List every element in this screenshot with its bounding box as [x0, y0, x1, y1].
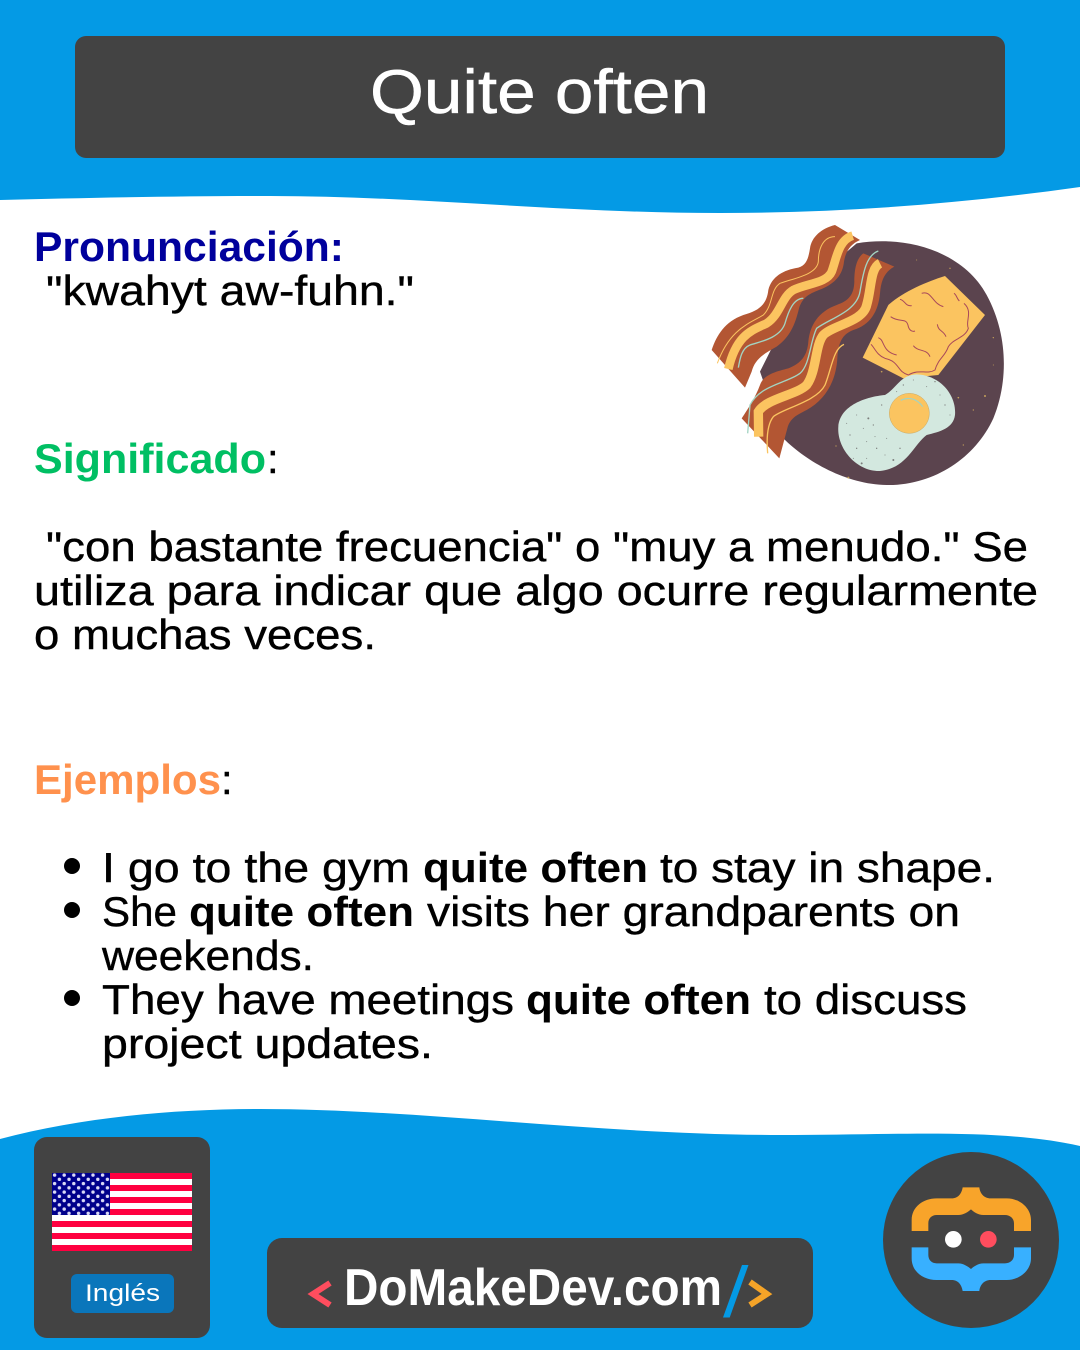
text: meaning: "con bastante frecuencia" o "muy a menudo." Se — [46, 523, 1028, 570]
title: Quite often — [370, 58, 709, 127]
example 3: to discuss — [764, 976, 967, 1023]
icon: US flag — [52, 1173, 192, 1251]
example 1: to stay in shape. — [660, 844, 995, 891]
header wave background — [0, 0, 1080, 213]
icon: slash — [723, 1265, 748, 1318]
text: meaning — [34, 523, 1038, 658]
list of examples — [64, 844, 995, 1067]
example 1: I go to the gym — [102, 844, 410, 891]
fried egg — [838, 374, 955, 471]
example 3: project updates. — [102, 1020, 433, 1067]
plate speckles — [835, 259, 994, 479]
text: meaning: o muchas veces. — [34, 611, 376, 658]
bacon strip 1 — [712, 225, 860, 388]
bacon strip 2 — [742, 251, 894, 458]
heading: Significado: : — [267, 435, 279, 482]
website banner — [267, 1238, 813, 1328]
example 2: weekends. — [101, 932, 314, 979]
example 3: quite often — [526, 976, 751, 1023]
icon: left chevron — [313, 1283, 330, 1305]
website name: DoMakeDev.com — [344, 1259, 722, 1317]
icon: right chevron — [750, 1282, 767, 1305]
icon: red dot — [980, 1231, 997, 1248]
logo badge — [883, 1152, 1059, 1328]
language card — [34, 1137, 210, 1338]
icon: white dot — [945, 1231, 962, 1248]
illustration: bacon, toast and egg plate — [712, 225, 1004, 485]
icon: blue brace — [912, 1247, 1031, 1291]
toast — [863, 276, 985, 378]
example 3: They have meetings — [102, 976, 514, 1023]
heading: Ejemplos: : — [221, 756, 233, 803]
heading: Significado: Significado — [34, 435, 266, 482]
example 2: She — [102, 888, 177, 935]
example 1 — [64, 844, 995, 891]
icon: orange brace — [912, 1187, 1031, 1231]
example 2 — [64, 888, 960, 979]
example 3 — [64, 976, 967, 1067]
language button — [71, 1274, 174, 1313]
text: meaning: utiliza para indicar que algo ocurre regularmente — [34, 567, 1038, 614]
example 2: visits her grandparents on — [427, 888, 960, 935]
heading: Pronunciación: Pronunciación: — [34, 223, 344, 270]
example 1: quite often — [423, 844, 648, 891]
example 2: quite often — [189, 888, 414, 935]
title banner — [75, 36, 1005, 158]
text: pronunciation: "kwahyt aw-fuhn." — [46, 267, 414, 314]
plate — [760, 241, 1004, 485]
footer wave background — [0, 1109, 1080, 1350]
language button: Inglés — [85, 1280, 160, 1307]
heading: Ejemplos: Ejemplos — [34, 756, 221, 803]
